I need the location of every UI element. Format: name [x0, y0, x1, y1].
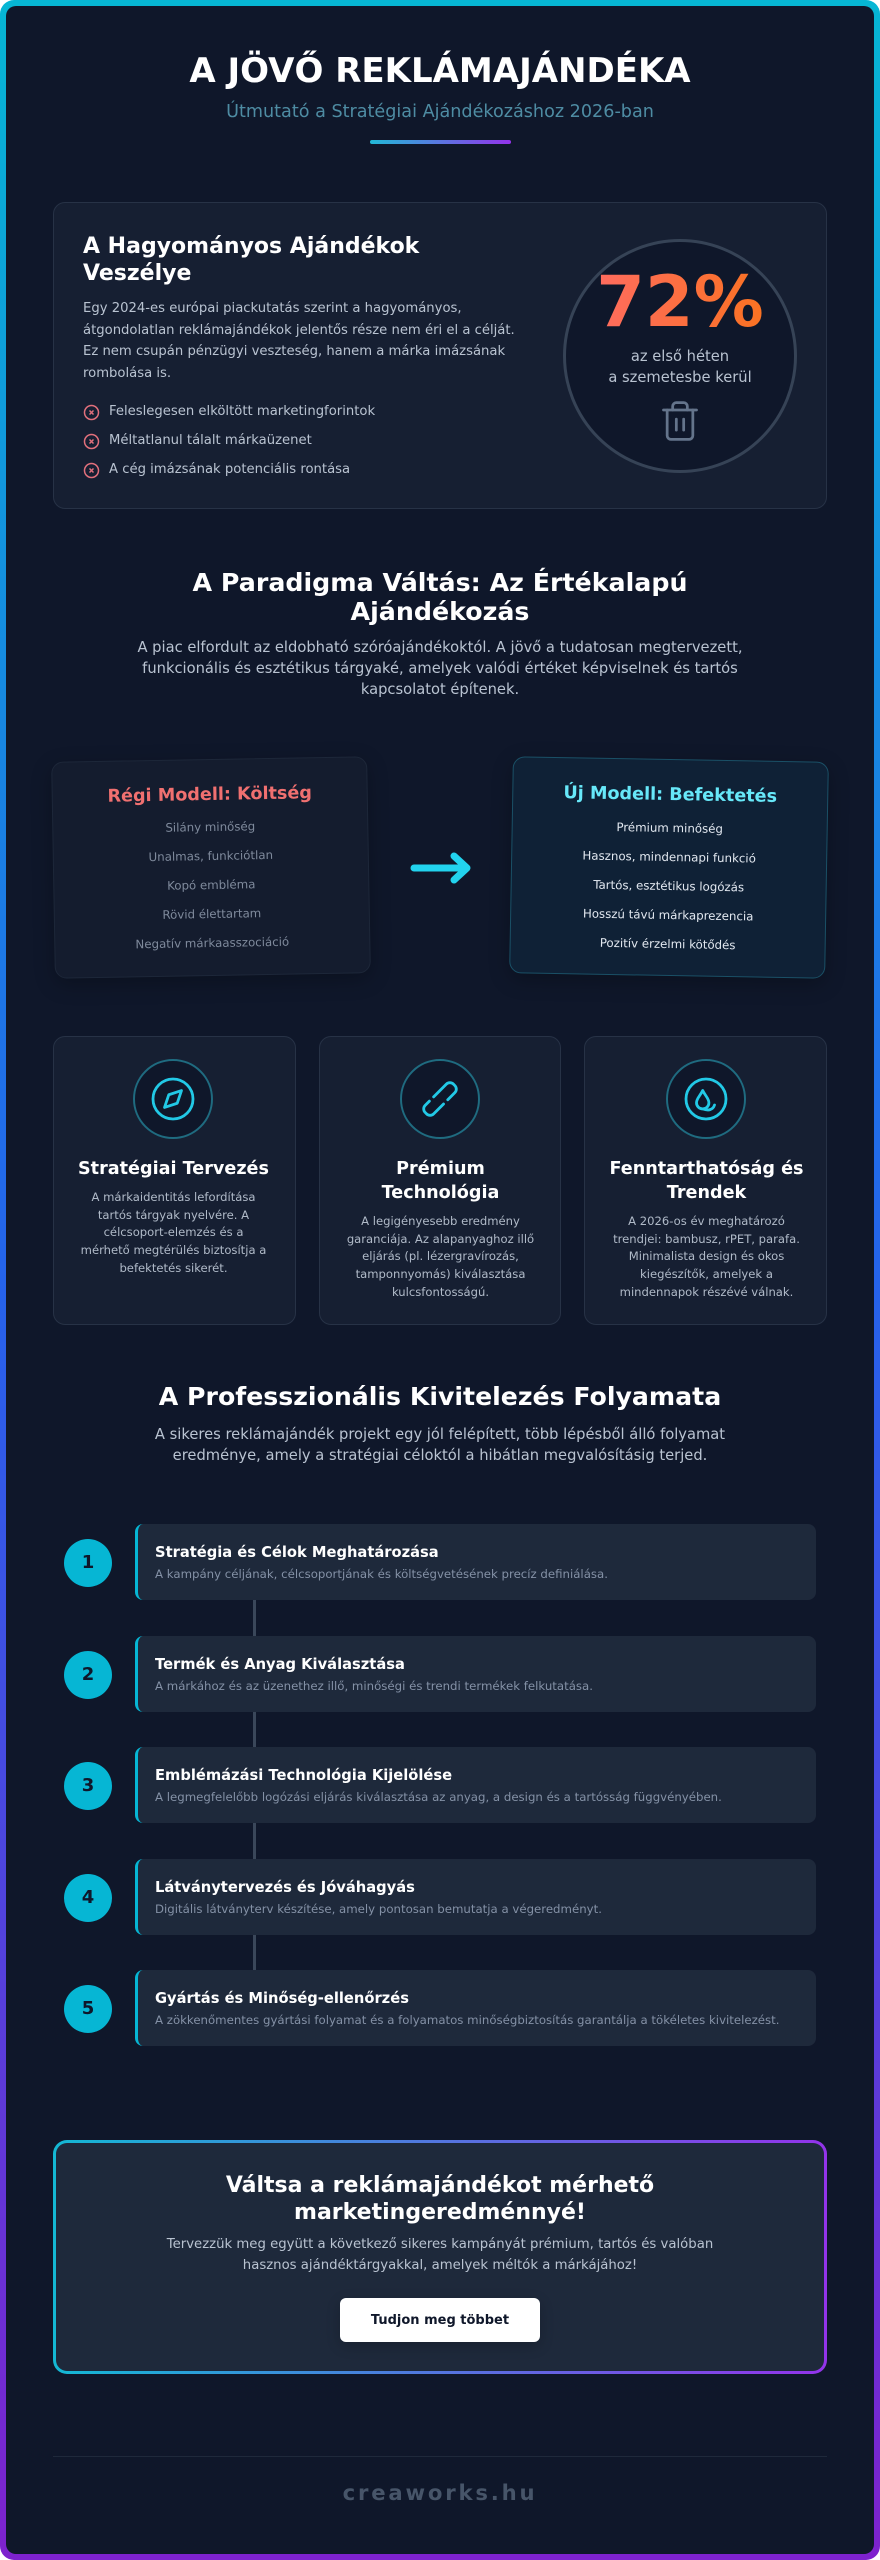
paragraph: danger: rombolása is. — [83, 366, 171, 381]
stat caption — [608, 348, 752, 386]
step 3 card — [135, 1747, 816, 1823]
panel: new model: Hosszú távú márkaprezencia — [583, 906, 754, 923]
new model items: Prémium minőség — [616, 820, 723, 835]
step 3 title: Emblémázási Technológia Kijelölése — [155, 1767, 452, 1784]
risk text 3: A cég imázsának potenciális rontása — [109, 462, 350, 477]
text: sustainability and trends: kiegészítők, amelyek a — [640, 1267, 773, 1281]
list: risks — [84, 404, 375, 478]
text: sustainability and trends: mindennapok részévé válnak. — [620, 1285, 793, 1299]
header accent bar — [370, 140, 511, 144]
step 2 number — [64, 1651, 112, 1699]
paragraph: process: A sikeres reklámajándék projekt egy jól felépített, több lépésből álló folyamat — [155, 1426, 725, 1443]
panel: new model: Hasznos, mindennapi funkció — [582, 848, 756, 865]
panel: new model — [509, 756, 829, 979]
step 1 text: A kampány céljának, célcsoportjának és költségvetésének precíz definiálása. — [155, 1567, 608, 1581]
text: sustainability and trends — [613, 1214, 800, 1299]
paragraph: danger — [83, 301, 515, 381]
new model heading: Új Modell: Befektetés — [563, 783, 777, 807]
panel: strategic planning — [53, 1036, 296, 1325]
step 5 number — [64, 1985, 112, 2033]
paragraph: paradigm shift: funkcionális és esztétikus tárgyaké, amelyek valódi értéket képviselnek és tartós — [142, 660, 738, 677]
text: strategic planning: mérhető megtérülés biztosítja a — [81, 1243, 266, 1257]
heading: strategic planning: Stratégiai Tervezés — [78, 1159, 269, 1179]
step 1 card — [135, 1524, 816, 1600]
icon: x circle 2 — [84, 434, 100, 450]
step 3 number — [64, 1762, 112, 1810]
stat caption: az első héten — [631, 348, 729, 365]
icon: compass — [133, 1059, 213, 1139]
button: Tudjon meg többet — [371, 2313, 509, 2328]
icon: drop — [666, 1059, 746, 1139]
text: call to action: hasznos ajándéktárgyakkal, amelyek méltók a márkájához! — [243, 2258, 637, 2273]
panel: new model: Pozitív érzelmi kötődés — [600, 935, 736, 952]
step 2 card — [135, 1636, 816, 1712]
step 4 text: Digitális látványterv készítése, amely pontosan bemutatja a végeredményt. — [155, 1902, 602, 1916]
old model items: Silány minőség — [165, 819, 255, 835]
heading: danger: A Hagyományos Ajándékok — [83, 234, 419, 259]
step 1 title: Stratégia és Célok Meghatározása — [155, 1544, 439, 1561]
heading: sustainability and trends: Trendek — [667, 1183, 746, 1203]
paragraph: danger: Egy 2024-es európai piackutatás szerint a hagyományos, — [83, 301, 462, 316]
text: sustainability and trends: trendjei: bambusz, rPET, parafa. — [613, 1232, 800, 1246]
footer divider — [53, 2456, 827, 2457]
heading: paradigm shift: Ajándékozás — [351, 597, 529, 626]
step 2 text: A márkához és az üzenethez illő, minőségi és trendi termékek felkutatása. — [155, 1679, 593, 1693]
paragraph: paradigm shift: A piac elfordult az eldobható szóróajándékoktól. A jövő a tudatosan megtervezett, — [137, 639, 743, 656]
paragraph: danger: Ez nem csupán pénzügyi veszteség, hanem a márka imázsának — [83, 344, 505, 359]
text: premium technology: garanciája. Az alapanyaghoz illő — [347, 1232, 534, 1246]
heading: premium technology: Technológia — [382, 1183, 499, 1203]
step 5 card — [135, 1970, 816, 2046]
panel: old model — [51, 756, 371, 979]
text: strategic planning: tartós tárgyak nyelvére. A — [98, 1208, 249, 1222]
stat caption: a szemetesbe kerül — [608, 369, 752, 386]
heading: process: A Professzionális Kivitelezés Folyamata — [159, 1382, 721, 1411]
title: A JÖVŐ REKLÁMAJÁNDÉKA — [189, 51, 691, 91]
text: premium technology: eljárás (pl. lézergravírozás, — [362, 1249, 519, 1263]
heading: call to action — [226, 2173, 654, 2225]
panel: traditional gifts danger — [53, 202, 827, 509]
heading: paradigm shift — [192, 568, 687, 626]
icon: link — [400, 1059, 480, 1139]
text: premium technology: A legigényesebb eredmény — [361, 1214, 520, 1228]
step 2 title: Termék és Anyag Kiválasztása — [155, 1656, 405, 1673]
panel: call to action — [53, 2140, 827, 2374]
heading: sustainability and trends — [609, 1159, 804, 1203]
heading: call to action: Váltsa a reklámajándékot mérhető — [226, 2173, 654, 2198]
risk text 2: Méltatlanul tálalt márkaüzenet — [109, 433, 312, 448]
risk text 1: Feleslegesen elköltött marketingforintok — [109, 404, 375, 419]
text: strategic planning: befektetés sikerét. — [119, 1261, 228, 1275]
text: strategic planning: célcsoport-elemzés és a — [104, 1225, 243, 1239]
paragraph: process — [155, 1426, 725, 1464]
icon: trash — [662, 401, 698, 441]
text: premium technology: kulcsfontosságú. — [392, 1285, 489, 1299]
stat circle — [563, 239, 797, 473]
footer brand: creaworks.hu — [343, 2480, 537, 2505]
panel: sustainability and trends — [584, 1036, 827, 1325]
heading: call to action: marketingeredménnyé! — [294, 2200, 586, 2225]
panel: premium technology — [319, 1036, 561, 1325]
step 3 text: A legmegfelelőbb logózási eljárás kiválasztása az anyag, a design és a tartósság függvényében. — [155, 1790, 722, 1804]
paragraph: paradigm shift: kapcsolatot építenek. — [361, 681, 519, 698]
text: premium technology — [347, 1214, 534, 1299]
step 4 number — [64, 1874, 112, 1922]
paragraph: paradigm shift — [137, 639, 743, 698]
step 5 text: A zökkenőmentes gyártási folyamat és a folyamatos minőségbiztosítás garantálja a tökéletes kivitelezést. — [155, 2013, 779, 2027]
step 5 number: 5 — [82, 1998, 94, 2019]
text: sustainability and trends: A 2026-os év meghatározó — [628, 1214, 785, 1228]
text: sustainability and trends: Minimalista design és okos — [629, 1249, 784, 1263]
panel: new model: Tartós, esztétikus logózás — [593, 877, 744, 894]
step 3 number: 3 — [82, 1775, 94, 1796]
old model heading: Régi Modell: Költség — [107, 783, 312, 807]
heading: danger — [83, 234, 420, 286]
icon: x circle 3 — [84, 462, 100, 478]
step 4 card — [135, 1859, 816, 1935]
heading: premium technology: Prémium — [396, 1159, 485, 1179]
paragraph: danger: átgondolatlan reklámajándékok jelentős része nem éri el a célját. — [83, 323, 515, 338]
step 4 title: Látványtervezés és Jóváhagyás — [155, 1879, 415, 1896]
step 2 number: 2 — [82, 1664, 94, 1685]
step 1 number — [64, 1539, 112, 1587]
step 1 number: 1 — [82, 1552, 94, 1573]
heading: danger: Veszélye — [83, 261, 191, 286]
panel: old model: Kopó embléma — [167, 877, 256, 893]
text: strategic planning — [81, 1190, 266, 1275]
heading: paradigm shift: A Paradigma Váltás: Az Értékalapú — [193, 568, 687, 597]
connector lines — [253, 1600, 256, 1636]
text: premium technology: tamponnyomás) kiválasztása — [356, 1267, 525, 1281]
stat number — [563, 260, 797, 344]
subtitle: Útmutató a Stratégiai Ajándékozáshoz 2026-ban — [226, 102, 654, 122]
panel: old model: Rövid élettartam — [162, 906, 261, 922]
icon: x circle 1 — [84, 404, 100, 420]
panel: old model: Unalmas, funkciótlan — [148, 848, 273, 864]
heading: sustainability and trends: Fenntarthatóság és — [609, 1159, 804, 1179]
step 4 number: 4 — [82, 1887, 94, 1908]
call to action fill — [56, 2143, 824, 2371]
step 5 title: Gyártás és Minőség-ellenőrzés — [155, 1990, 409, 2007]
button — [340, 2298, 540, 2342]
text: call to action — [166, 2237, 713, 2273]
text: strategic planning: A márkaidentitás lefordítása — [91, 1190, 256, 1204]
panel: old model: Negatív márkaasszociáció — [135, 935, 289, 951]
arrow — [410, 852, 470, 884]
heading: premium technology — [382, 1159, 499, 1203]
text: call to action: Tervezzük meg együtt a következő sikeres kampányát prémium, tartós és valóban — [167, 2237, 713, 2252]
stat number: 72% — [596, 261, 764, 343]
paragraph: process: eredménye, amely a stratégiai céloktól a hibátlan megvalósításig terjed. — [173, 1447, 707, 1464]
